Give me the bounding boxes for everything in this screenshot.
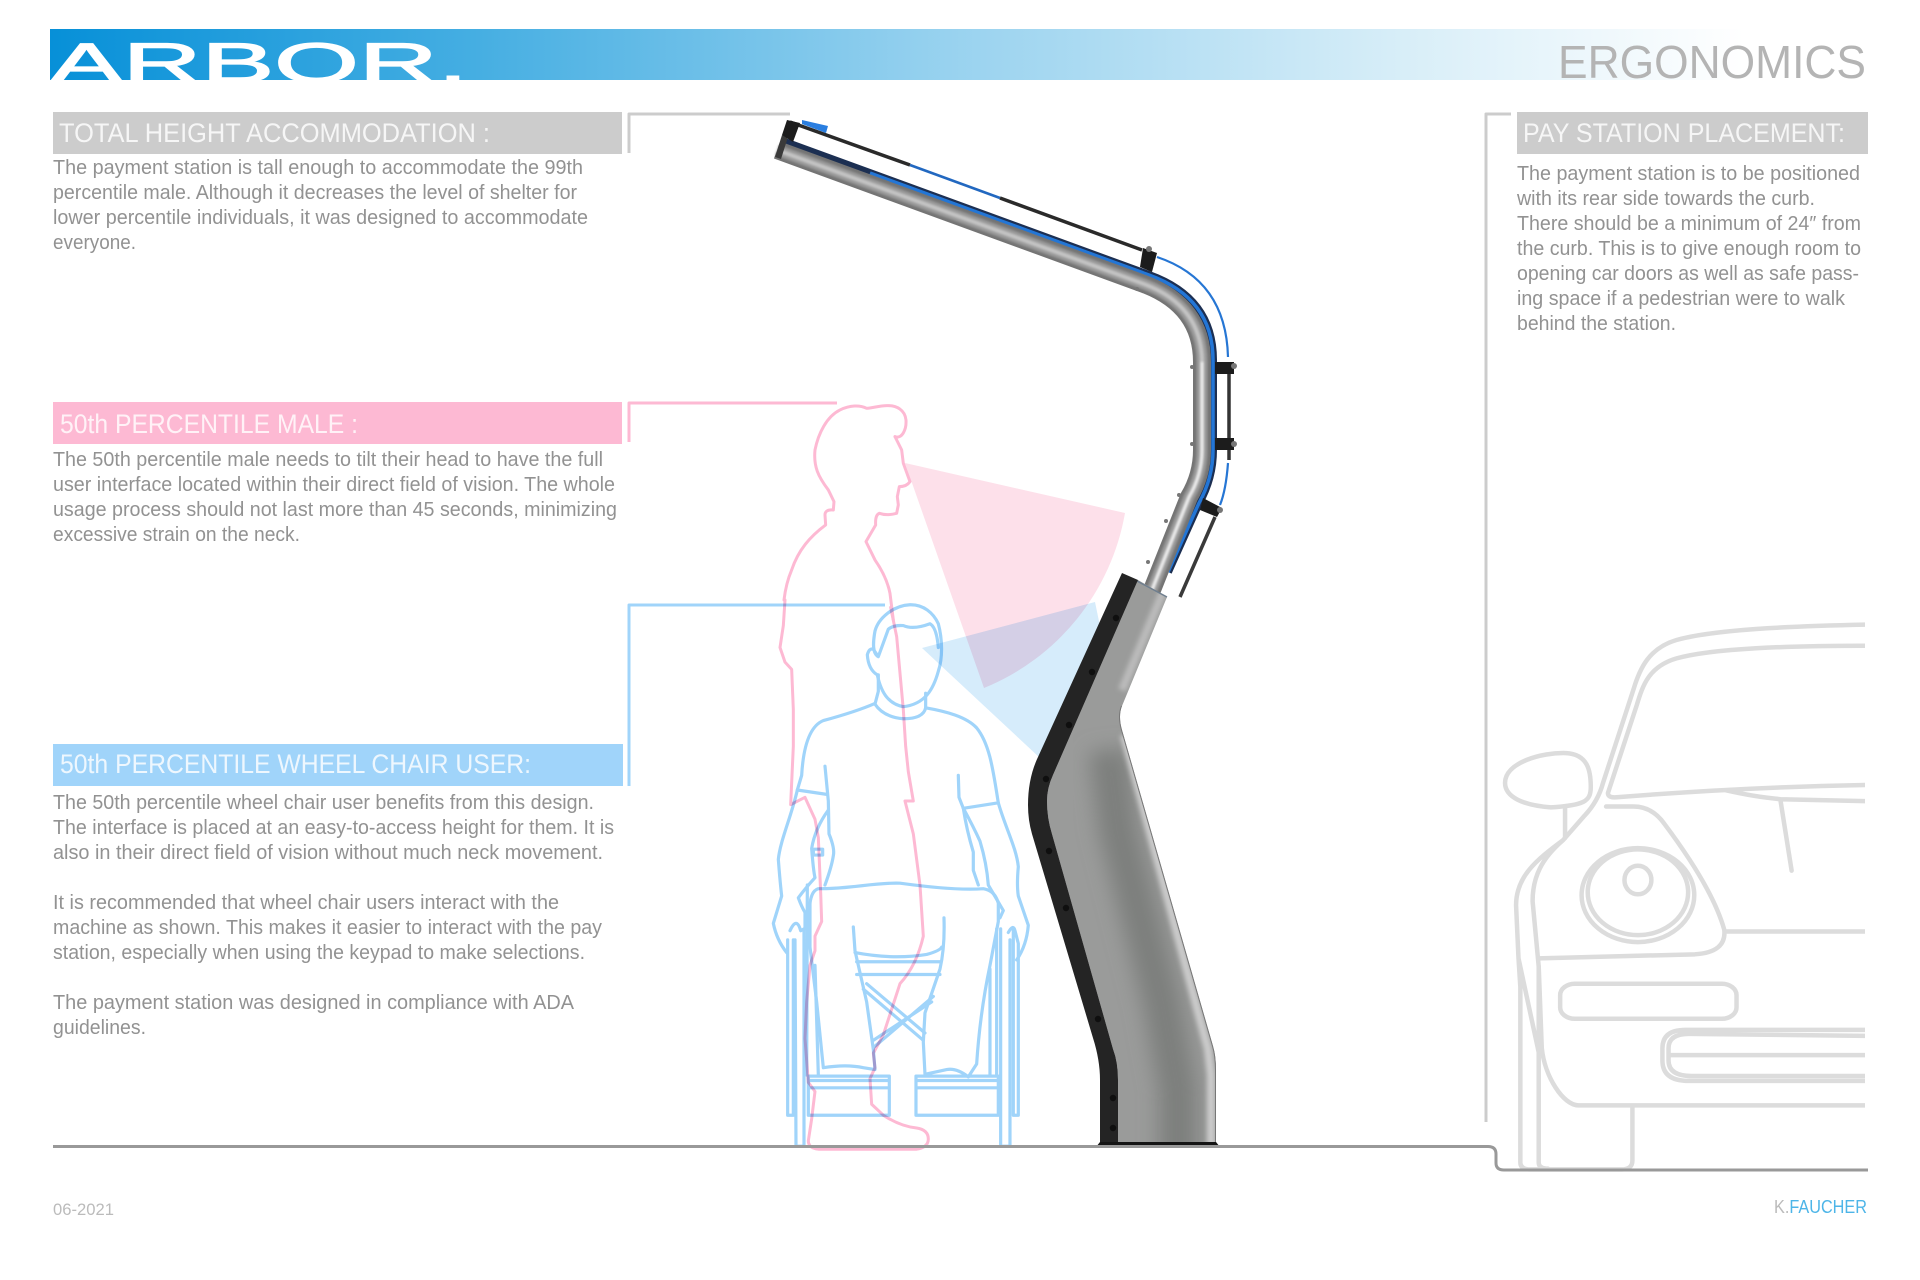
figure: 50th percentile male [780, 406, 928, 1149]
text block: male: user interface located within their direct field of vision. The whole [53, 474, 615, 496]
text block: wheel chair: station, especially when using the keypad to make selections. [53, 942, 585, 964]
text block: wheel chair: The 50th percentile wheel chair user benefits from this design. [53, 792, 594, 814]
headlight center [1624, 866, 1651, 894]
text block: placement: opening car doors as well as safe pass- [1517, 263, 1859, 285]
panel: total height accommodation [53, 112, 622, 254]
text block: male: The 50th percentile male needs to tilt their head to have the full [53, 449, 603, 471]
heading bar: placement: PAY STATION PLACEMENT: [1523, 118, 1845, 148]
text block: wheel chair: also in their direct field of vision without much neck movement. [53, 842, 603, 864]
ground and curb line [53, 1146, 1868, 1170]
text block: total height: lower percentile individuals, it was designed to accommodate [53, 207, 588, 229]
text block: placement [1516, 163, 1861, 335]
windshield [1608, 646, 1872, 871]
vision cone: wheel chair user [922, 602, 1105, 758]
headlight housing [1539, 807, 1872, 958]
blue tip [802, 120, 828, 133]
text block: male: excessive strain on the neck. [53, 524, 300, 546]
footer date: 06-2021 [53, 1200, 114, 1219]
grill [1662, 1030, 1872, 1081]
heading bar: wheel chair: 50th PERCENTILE WHEEL CHAIR USER: [60, 749, 531, 779]
text block: total height: everyone. [53, 232, 136, 254]
band screws [1043, 615, 1119, 1131]
text block: wheel chair: machine as shown. This makes it easier to interact with the pay [53, 917, 602, 939]
bracket: pink male leader [629, 403, 837, 442]
pay station post [1028, 573, 1220, 1180]
text block: wheel chair: It is recommended that wheel chair users interact with the [53, 892, 559, 914]
figure: wheel chair user [773, 605, 1028, 1146]
heading bar: male [53, 402, 622, 444]
text block: wheel chair: The payment station was designed in compliance with ADA [53, 992, 575, 1014]
car outline [1505, 624, 1872, 1169]
header gradient banner [50, 29, 1744, 80]
panel: pay station placement [1516, 112, 1868, 335]
rail brackets [782, 120, 1234, 517]
panel: 50th percentile wheel chair user [53, 744, 623, 1039]
top rail [790, 122, 1229, 597]
arm end cap [775, 135, 788, 159]
text block: placement: There should be a minimum of 24″ from [1517, 213, 1861, 235]
heading bar: placement [1517, 112, 1868, 154]
heading bar: male: 50th PERCENTILE MALE : [60, 409, 358, 439]
mirror [1505, 753, 1591, 838]
heading bar: total height: TOTAL HEIGHT ACCOMMODATION : [59, 118, 490, 148]
text block: placement: behind the station. [1517, 313, 1676, 335]
text block: total height [53, 157, 588, 254]
heading bar: total height [53, 112, 622, 154]
text block: male: usage process should not last more than 45 seconds, minimizing [53, 499, 617, 521]
post base plate [1096, 1142, 1220, 1147]
text block: male [53, 449, 617, 546]
curved arm tube [775, 120, 1237, 600]
text block: placement: with its rear side towards the curb. [1516, 188, 1815, 210]
rail bolts [1135, 246, 1237, 564]
post body [1047, 580, 1216, 1180]
text block: placement: the curb. This is to give enough room to [1517, 238, 1861, 260]
text block: total height: The payment station is tall enough to accommodate the 99th [53, 157, 583, 179]
car body [1516, 624, 1872, 1169]
front wheel inner [1539, 967, 1548, 1169]
panel: 50th percentile male [53, 402, 622, 546]
footer author: K.FAUCHER [1774, 1197, 1867, 1217]
headlight [1582, 848, 1694, 942]
bracket: placement leader [1486, 114, 1511, 1122]
text block: placement: ing space if a pedestrian were to walk [1517, 288, 1846, 310]
text block: wheel chair: guidelines. [53, 1017, 146, 1039]
bumper slot [1560, 984, 1737, 1019]
vision cone: male [905, 463, 1125, 688]
arm grey pipe [777, 150, 1202, 600]
text block: wheel chair: The interface is placed at an easy-to-access height for them. It is [53, 817, 614, 839]
bracket: gray height leader [629, 114, 790, 153]
logo: ARBOR: ARBOR. [50, 31, 468, 94]
text block: placement: The payment station is to be positioned [1517, 163, 1860, 185]
arm blue channel [782, 141, 1213, 572]
post black band [1028, 573, 1138, 1144]
heading bar: wheel chair [53, 744, 623, 786]
post collar line [1137, 581, 1167, 597]
headlight inner ring [1588, 849, 1688, 935]
page title: ergonomics: ERGONOMICS [1558, 36, 1866, 88]
bracket: blue wheel chair leader [629, 605, 885, 786]
text block: wheel chair [53, 792, 614, 1039]
text block: total height: percentile male. Although it decreases the level of shelter for [53, 182, 577, 204]
